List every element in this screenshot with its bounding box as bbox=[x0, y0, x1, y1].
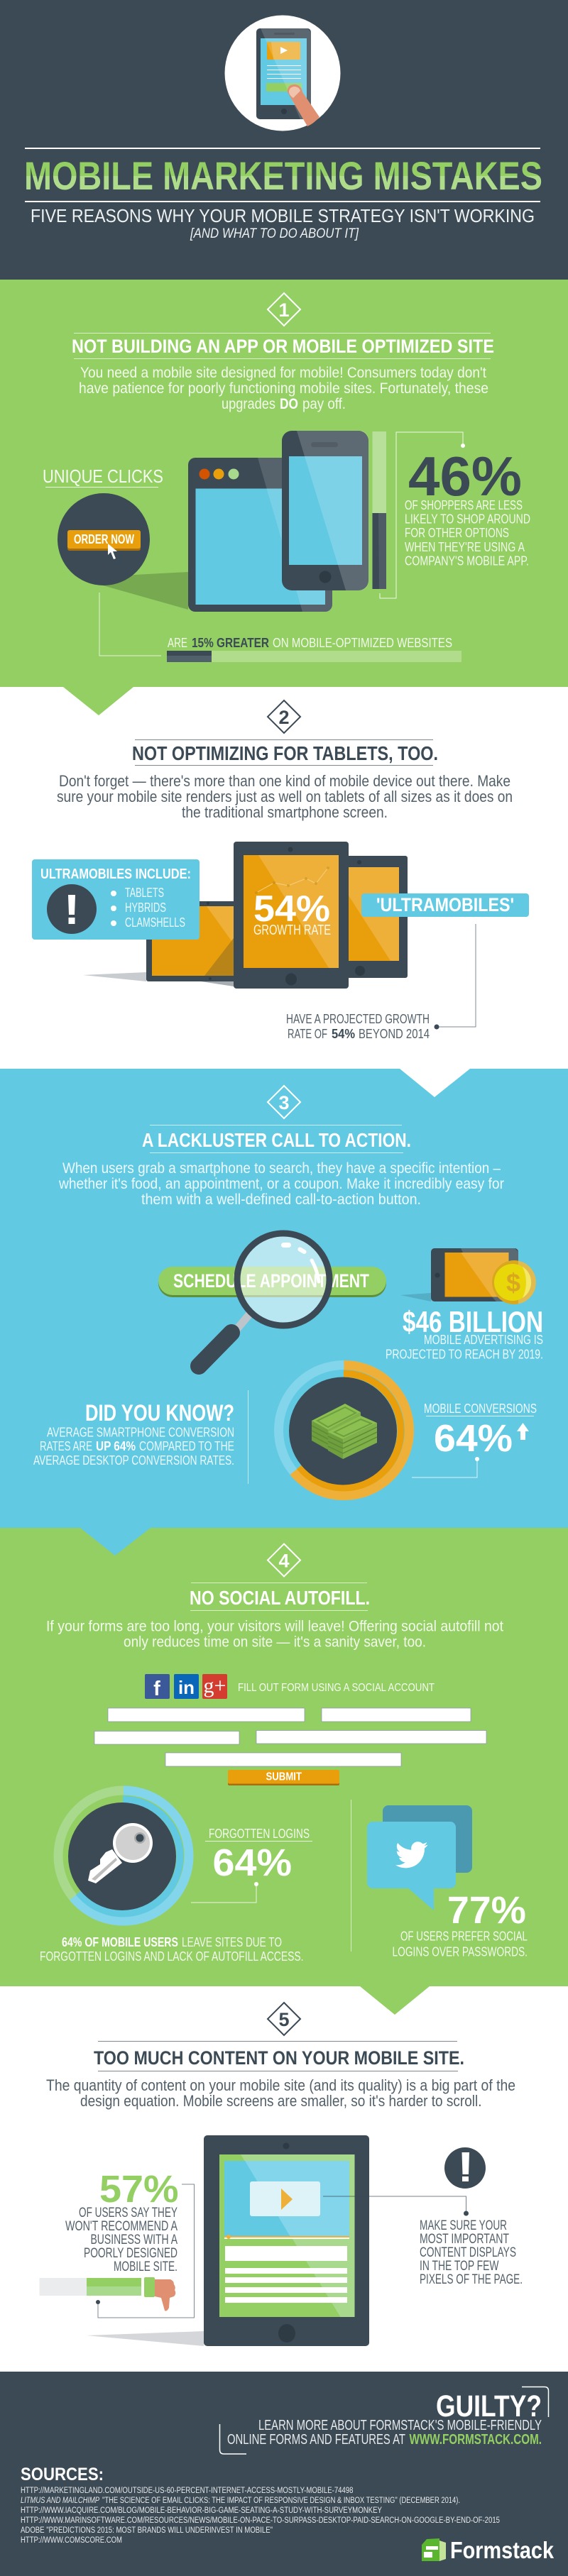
shadow: tablet to circle bbox=[103, 572, 188, 610]
number badge 3: 3 bbox=[278, 1092, 290, 1113]
body text 1: upgrades bbox=[222, 396, 275, 412]
stat caption: recommend: MOBILE SITE. bbox=[114, 2259, 178, 2274]
body text 1: You need a mobile site designed for mobile! Consumers today don't bbox=[80, 365, 486, 381]
list: device types: CLAMSHELLS bbox=[125, 915, 185, 930]
body text 4: only reduces time on site — it's a sanity saver, too. bbox=[124, 1634, 426, 1651]
stat caption: shoppers: LIKELY TO SHOP AROUND bbox=[405, 512, 530, 527]
body text 4: If your forms are too long, your visitors will leave! Offering social autofill not bbox=[46, 1618, 503, 1635]
panel: mistake 5 bbox=[40, 1986, 523, 2346]
arrow: section 2 pointer bbox=[400, 1069, 470, 1097]
stat: 46%: 46% bbox=[408, 445, 522, 507]
icon: tablet with coin: $ bbox=[506, 1268, 520, 1297]
icon: landscape tablet bbox=[146, 901, 239, 986]
body text 3 bbox=[58, 1160, 504, 1208]
stat caption: projected growth: HAVE A PROJECTED GROWTH bbox=[286, 1012, 430, 1026]
stat caption: shoppers: COMPANY'S MOBILE APP. bbox=[405, 554, 529, 568]
stat caption: social logins bbox=[392, 1929, 528, 1959]
icon: exclamation bbox=[47, 884, 97, 934]
stat caption: 15% greater: 15% GREATER bbox=[192, 636, 269, 650]
stat caption: 15% greater bbox=[168, 636, 452, 650]
icon: thumbs down arm bbox=[40, 2277, 175, 2311]
sources heading: SOURCES: bbox=[21, 2465, 104, 2484]
number badge 5 bbox=[268, 2003, 300, 2035]
heading 3: A LACKLUSTER CALL TO ACTION. bbox=[142, 1129, 411, 1151]
panel: ultramobiles include bbox=[32, 859, 200, 940]
sources list bbox=[21, 2487, 500, 2545]
bracket: bottom left bbox=[220, 2424, 246, 2454]
icon: magnifying glass bbox=[199, 1233, 329, 1366]
stat caption: shoppers: FOR OTHER OPTIONS bbox=[405, 526, 509, 540]
heading 1: NOT BUILDING AN APP OR MOBILE OPTIMIZED SITE bbox=[72, 336, 494, 357]
stat caption: mobile users bbox=[40, 1935, 304, 1964]
callout: did you know: RATES ARE bbox=[40, 1439, 92, 1453]
icons: social buttons: g+ bbox=[204, 1674, 226, 1697]
stat caption: projected growth: 54% bbox=[332, 1027, 355, 1041]
icon: phone in white circle bbox=[224, 16, 341, 131]
connector: donut to 64% bbox=[412, 1457, 479, 1477]
number badge 1: 1 bbox=[278, 299, 290, 321]
stat caption: mobile users: 64% OF MOBILE USERS bbox=[62, 1935, 178, 1949]
stat: 77%: 77% bbox=[447, 1889, 526, 1932]
stat caption: recommend: POORLY DESIGNED bbox=[84, 2246, 178, 2261]
list: device types: TABLETS bbox=[125, 886, 164, 900]
stat caption: projected growth: RATE OF bbox=[288, 1027, 327, 1041]
icon: order now button in circle bbox=[58, 493, 150, 585]
panel: footer bbox=[0, 2372, 568, 2576]
text: content tip: IN THE TOP FEW bbox=[420, 2259, 499, 2274]
chart: vertical 46% bar bbox=[372, 431, 386, 589]
button: submit bbox=[228, 1770, 339, 1785]
callout: did you know bbox=[33, 1400, 234, 1468]
callout: did you know: AVERAGE SMARTPHONE CONVERSION bbox=[47, 1425, 234, 1439]
callout: did you know: DID YOU KNOW? bbox=[85, 1400, 234, 1426]
body text 1 bbox=[79, 365, 488, 412]
button: schedule appointment: SCHEDULE APPOINTMENT bbox=[173, 1270, 369, 1292]
connector: bar to 46% bbox=[380, 432, 465, 598]
panel: header bbox=[0, 0, 568, 280]
stat caption: shoppers: OF SHOPPERS ARE LESS bbox=[405, 498, 523, 512]
arrow: section 3 pointer bbox=[80, 1528, 151, 1556]
callout text: learn more bbox=[227, 2418, 542, 2448]
icon: tablet with coin bbox=[400, 1248, 536, 1304]
label: unique clicks: UNIQUE CLICKS bbox=[43, 466, 163, 487]
body text 2: Don't forget — there's more than one kind of mobile device out there. Make bbox=[59, 772, 510, 790]
chart: mobile conversions donut bbox=[278, 1365, 409, 1496]
stat caption: recommend bbox=[65, 2206, 178, 2274]
icon: order now button in circle: ORDER NOW bbox=[74, 532, 134, 546]
number badge 5: 5 bbox=[278, 2009, 290, 2030]
arrow: section 1 pointer bbox=[63, 687, 133, 715]
sources list: HTTP://WWW.COMSCORE.COM bbox=[21, 2536, 122, 2545]
connector: video to tip bbox=[323, 2196, 469, 2216]
stat label: mobile conversions: MOBILE CONVERSIONS bbox=[424, 1402, 537, 1416]
stat label: forgotten logins: FORGOTTEN LOGINS bbox=[209, 1827, 310, 1841]
icons: social buttons: in bbox=[178, 1677, 195, 1698]
connector: circle to greater bar bbox=[99, 593, 161, 656]
connector: 57% to arm bbox=[96, 2184, 195, 2318]
stat caption: recommend: OF USERS SAY THEY bbox=[79, 2206, 178, 2220]
icon: twitter speech bubbles bbox=[367, 1805, 472, 1910]
icons: social buttons: f bbox=[153, 1678, 160, 1700]
number badge 1 bbox=[268, 293, 300, 326]
number badge 4: 4 bbox=[278, 1550, 290, 1571]
body text 5: design equation. Mobile screens are smaller, so it's harder to scroll. bbox=[80, 2092, 481, 2110]
arrow: section 4 pointer bbox=[360, 1986, 430, 2015]
icon: center tablet bbox=[234, 842, 349, 989]
subtitle note: [AND WHAT TO DO ABOUT IT] bbox=[190, 226, 359, 241]
list: device types: HYBRIDS bbox=[125, 901, 166, 915]
body text 5 bbox=[46, 2076, 515, 2110]
body text 3: them with a well-defined call-to-action button. bbox=[141, 1191, 421, 1208]
panel: mistake 3 bbox=[0, 1069, 568, 1528]
callout: did you know: AVERAGE DESKTOP CONVERSION RATES. bbox=[33, 1453, 234, 1468]
stat: 64% logins: 64% bbox=[213, 1842, 292, 1884]
shadow: big tablet bbox=[87, 2331, 204, 2346]
form label: FILL OUT FORM USING A SOCIAL ACCOUNT bbox=[238, 1682, 435, 1694]
body text 3: whether it's food, an appointment, or a coupon. Make it incredibly easy for bbox=[58, 1176, 504, 1192]
stat: 57%: 57% bbox=[99, 2168, 179, 2211]
connector: donut to 64% logins bbox=[191, 1882, 258, 1903]
callout: did you know: UP 64% bbox=[96, 1439, 136, 1453]
number badge 2 bbox=[268, 700, 300, 733]
sources list: LITMUS AND MAILCHIMP bbox=[21, 2497, 99, 2505]
sources list: HTTP://WWW.IACQUIRE.COM/BLOG/MOBILE-BEHAVIOR-BIG-GAME-SEATING-A-STUDY-WITH-SURVEYMONKEY bbox=[21, 2506, 382, 2515]
button: schedule appointment bbox=[158, 1267, 386, 1297]
body text 2: the traditional smartphone screen. bbox=[182, 803, 388, 821]
text: content tip: MAKE SURE YOUR bbox=[420, 2218, 507, 2233]
button: submit: SUBMIT bbox=[266, 1771, 302, 1783]
stat caption: 15% greater: ARE bbox=[168, 636, 187, 650]
stat caption: projected growth bbox=[286, 1012, 430, 1041]
line chart on tablet bbox=[255, 866, 329, 894]
body text 1: DO bbox=[280, 396, 298, 412]
stat: 64% conversions: 64% bbox=[434, 1417, 513, 1460]
body text 4 bbox=[46, 1618, 503, 1651]
body text 2: sure your mobile site renders just as well on tablets of all sizes as it does on bbox=[57, 788, 513, 805]
heading 5: TOO MUCH CONTENT ON YOUR MOBILE SITE. bbox=[94, 2047, 464, 2069]
panel: mistake 4 bbox=[0, 1528, 568, 1986]
panel: mistake 1 bbox=[0, 280, 568, 687]
body text 1: pay off. bbox=[302, 396, 346, 412]
heading 4: NO SOCIAL AUTOFILL. bbox=[190, 1587, 370, 1609]
chart: horizontal 15% bar bbox=[167, 651, 462, 662]
heading 2: NOT OPTIMIZING FOR TABLETS, TOO. bbox=[132, 742, 438, 764]
stat caption: social logins: LOGINS OVER PASSWORDS. bbox=[392, 1944, 528, 1959]
icon: key bbox=[88, 1823, 153, 1883]
shadow: device group bbox=[83, 972, 146, 981]
stat caption: mobile users: LEAVE SITES DUE TO bbox=[182, 1935, 282, 1949]
number badge 4 bbox=[268, 1544, 300, 1577]
text: content tip bbox=[420, 2218, 523, 2287]
body text 2 bbox=[57, 772, 513, 821]
stat: 54%: 54% bbox=[253, 888, 330, 930]
stat caption: mobile users: FORGOTTEN LOGINS AND LACK OF AUTOFILL ACCESS. bbox=[40, 1949, 304, 1964]
number badge 2: 2 bbox=[278, 707, 290, 728]
stat caption: social logins: OF USERS PREFER SOCIAL bbox=[400, 1929, 528, 1943]
sources list: "THE SCIENCE OF EMAIL CLICKS: THE IMPACT OF RESPONSIVE DESIGN & INBOX TESTING" (DECEMBER 2014). bbox=[102, 2497, 460, 2505]
icon: smartphone bbox=[282, 431, 368, 590]
icon: browser tablet bbox=[188, 458, 332, 612]
callout: did you know: COMPARED TO THE bbox=[139, 1439, 234, 1453]
label: ultramobiles: 'ULTRAMOBILES' bbox=[376, 894, 514, 915]
icon: right tablet bbox=[341, 856, 408, 978]
stat caption: recommend: WON'T RECOMMEND A bbox=[65, 2219, 178, 2234]
stat caption: shoppers bbox=[405, 498, 530, 568]
body text 3: When users grab a smartphone to search, they have a specific intention – bbox=[62, 1160, 501, 1177]
sources list: HTTP://MARKETINGLAND.COM/OUTSIDE-US-60-PERCENT-INTERNET-ACCESS-MOSTLY-MOBILE-74498 bbox=[21, 2487, 354, 2495]
stat label: growth rate: GROWTH RATE bbox=[253, 923, 331, 938]
text: content tip: MOST IMPORTANT bbox=[420, 2232, 509, 2247]
chart: forgotten logins donut bbox=[58, 1790, 189, 1921]
form fields bbox=[94, 1708, 486, 1766]
stat caption: projected growth: BEYOND 2014 bbox=[359, 1027, 430, 1041]
stat caption: mobile advertising bbox=[386, 1333, 543, 1361]
text: content tip: CONTENT DISPLAYS bbox=[420, 2245, 516, 2260]
body text 5: The quantity of content on your mobile site (and its quality) is a big part of the bbox=[46, 2076, 515, 2094]
connector: ultramobiles to caption bbox=[435, 924, 476, 1029]
arrow: up bbox=[517, 1423, 529, 1440]
bracket: top right bbox=[522, 2387, 548, 2417]
text: content tip: PIXELS OF THE PAGE. bbox=[420, 2272, 523, 2287]
logo: formstack: Formstack bbox=[450, 2537, 555, 2563]
panel: mistake 2 bbox=[32, 700, 529, 1041]
sources list: ADOBE "PREDICTIONS 2015: MOST BRANDS WILL UNDERINVEST IN MOBILE" bbox=[21, 2526, 273, 2535]
body text 1: have patience for poorly functioning mobile sites. Fortunately, these bbox=[79, 380, 488, 397]
stat caption: recommend: BUSINESS WITH A bbox=[91, 2233, 178, 2247]
list: device types bbox=[111, 886, 185, 930]
callout text: learn more: ONLINE FORMS AND FEATURES AT bbox=[227, 2432, 405, 2448]
icon: exclamation circle bbox=[444, 2147, 486, 2189]
stat caption: shoppers: WHEN THEY'RE USING A bbox=[405, 540, 525, 554]
stat caption: 15% greater: ON MOBILE-OPTIMIZED WEBSITES bbox=[273, 636, 452, 650]
panel: ultramobiles include: ULTRAMOBILES INCLUDE: bbox=[40, 866, 191, 882]
icon: big tablet with video page bbox=[204, 2135, 369, 2346]
icon: money stacks bbox=[312, 1404, 377, 1459]
icons: social buttons bbox=[145, 1674, 227, 1700]
callout title: guilty: GUILTY? bbox=[436, 2389, 542, 2423]
number badge 3 bbox=[268, 1086, 300, 1118]
